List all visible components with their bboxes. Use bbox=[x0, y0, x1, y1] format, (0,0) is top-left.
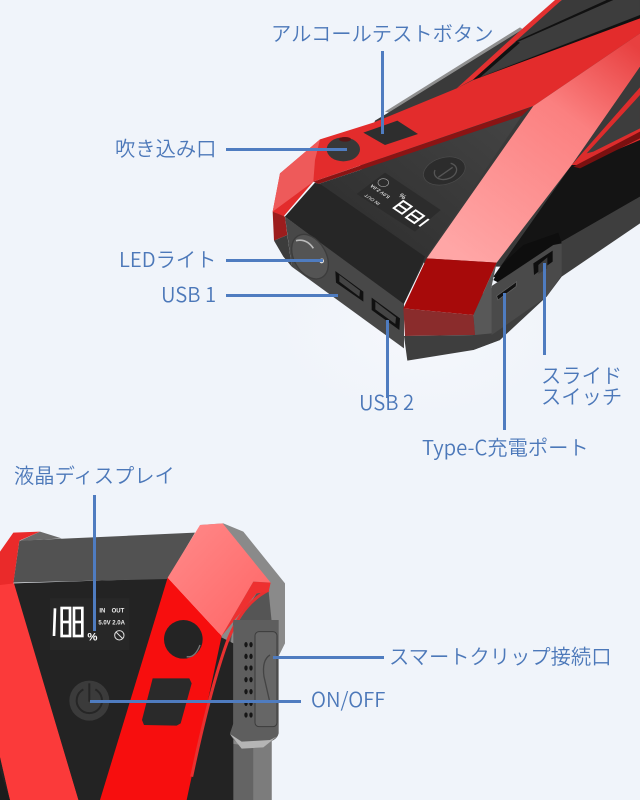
flashlight bbox=[284, 228, 336, 285]
gray side bbox=[200, 523, 285, 800]
product: power bank front view: % bbox=[87, 632, 97, 644]
dark red tip bbox=[403, 258, 497, 315]
clip connector bbox=[230, 620, 279, 745]
callout lines bbox=[90, 51, 546, 703]
side lower face bbox=[473, 197, 640, 350]
left red stripe bbox=[0, 532, 78, 800]
round inlet bbox=[164, 620, 203, 659]
side face black opening bbox=[493, 233, 562, 283]
red band bbox=[273, 18, 640, 217]
body top bbox=[360, 0, 640, 267]
label: alcohol test button: アルコールテストボタン bbox=[271, 17, 494, 47]
right red frame and dark panel bbox=[572, 87, 640, 165]
usb-c panel bbox=[492, 243, 562, 335]
display status text: IN OUT bbox=[363, 193, 382, 206]
top dark face bbox=[285, 116, 522, 305]
dark inner side bbox=[213, 592, 272, 690]
power button bbox=[69, 681, 109, 721]
label: USB 2: USB 2 bbox=[359, 386, 414, 416]
usb-c port bbox=[497, 282, 517, 300]
label: slide switch: スライド bbox=[541, 359, 622, 389]
label: slide switch: スイッチ bbox=[541, 380, 622, 410]
air blow hole bbox=[327, 137, 360, 161]
label: smart clip port: スマートクリップ接続口 bbox=[389, 640, 612, 670]
label: air inlet: 吹き込み口 bbox=[115, 132, 216, 162]
pink stripe bbox=[427, 33, 640, 263]
front face bbox=[285, 217, 404, 348]
LCD bbox=[50, 598, 129, 650]
left red corner bbox=[273, 139, 320, 212]
label: Type-C port: Type-C充電ポート bbox=[422, 431, 589, 461]
dark upper cap bbox=[13, 533, 195, 583]
alcohol test button bbox=[363, 121, 418, 145]
upper gray edge bbox=[385, 27, 525, 113]
background glow bbox=[270, 240, 570, 420]
power button bbox=[420, 152, 469, 190]
black face bbox=[0, 578, 233, 800]
product: power bank top view bbox=[273, 0, 640, 361]
test button bbox=[142, 678, 192, 726]
tip bottom bbox=[404, 335, 500, 361]
label: USB 1: USB 1 bbox=[161, 278, 216, 308]
product: power bank front view: 5.0V 2.0A bbox=[98, 621, 126, 627]
display status text: 5.0V 2.0A bbox=[369, 183, 392, 199]
display digits bbox=[394, 201, 429, 226]
label: LCD display: 液晶ディスプレイ bbox=[14, 459, 175, 489]
display status text: % bbox=[396, 192, 409, 201]
pink corner bbox=[168, 523, 271, 636]
label: on off: ON/OFF bbox=[311, 683, 385, 713]
top right dark panel bbox=[473, 0, 640, 79]
side black stripe bbox=[493, 128, 640, 280]
center red stripe bbox=[100, 578, 222, 800]
slide switch bbox=[533, 251, 553, 275]
product: power bank front view: OUT bbox=[112, 608, 125, 614]
USB ports bbox=[335, 271, 363, 302]
product: power bank front view: IN bbox=[99, 608, 105, 614]
display bbox=[357, 173, 441, 232]
display status text bbox=[363, 179, 409, 206]
product: power bank front view bbox=[0, 523, 285, 800]
label: LED light: LEDライト bbox=[119, 243, 216, 273]
label: slide switch bbox=[541, 359, 622, 410]
